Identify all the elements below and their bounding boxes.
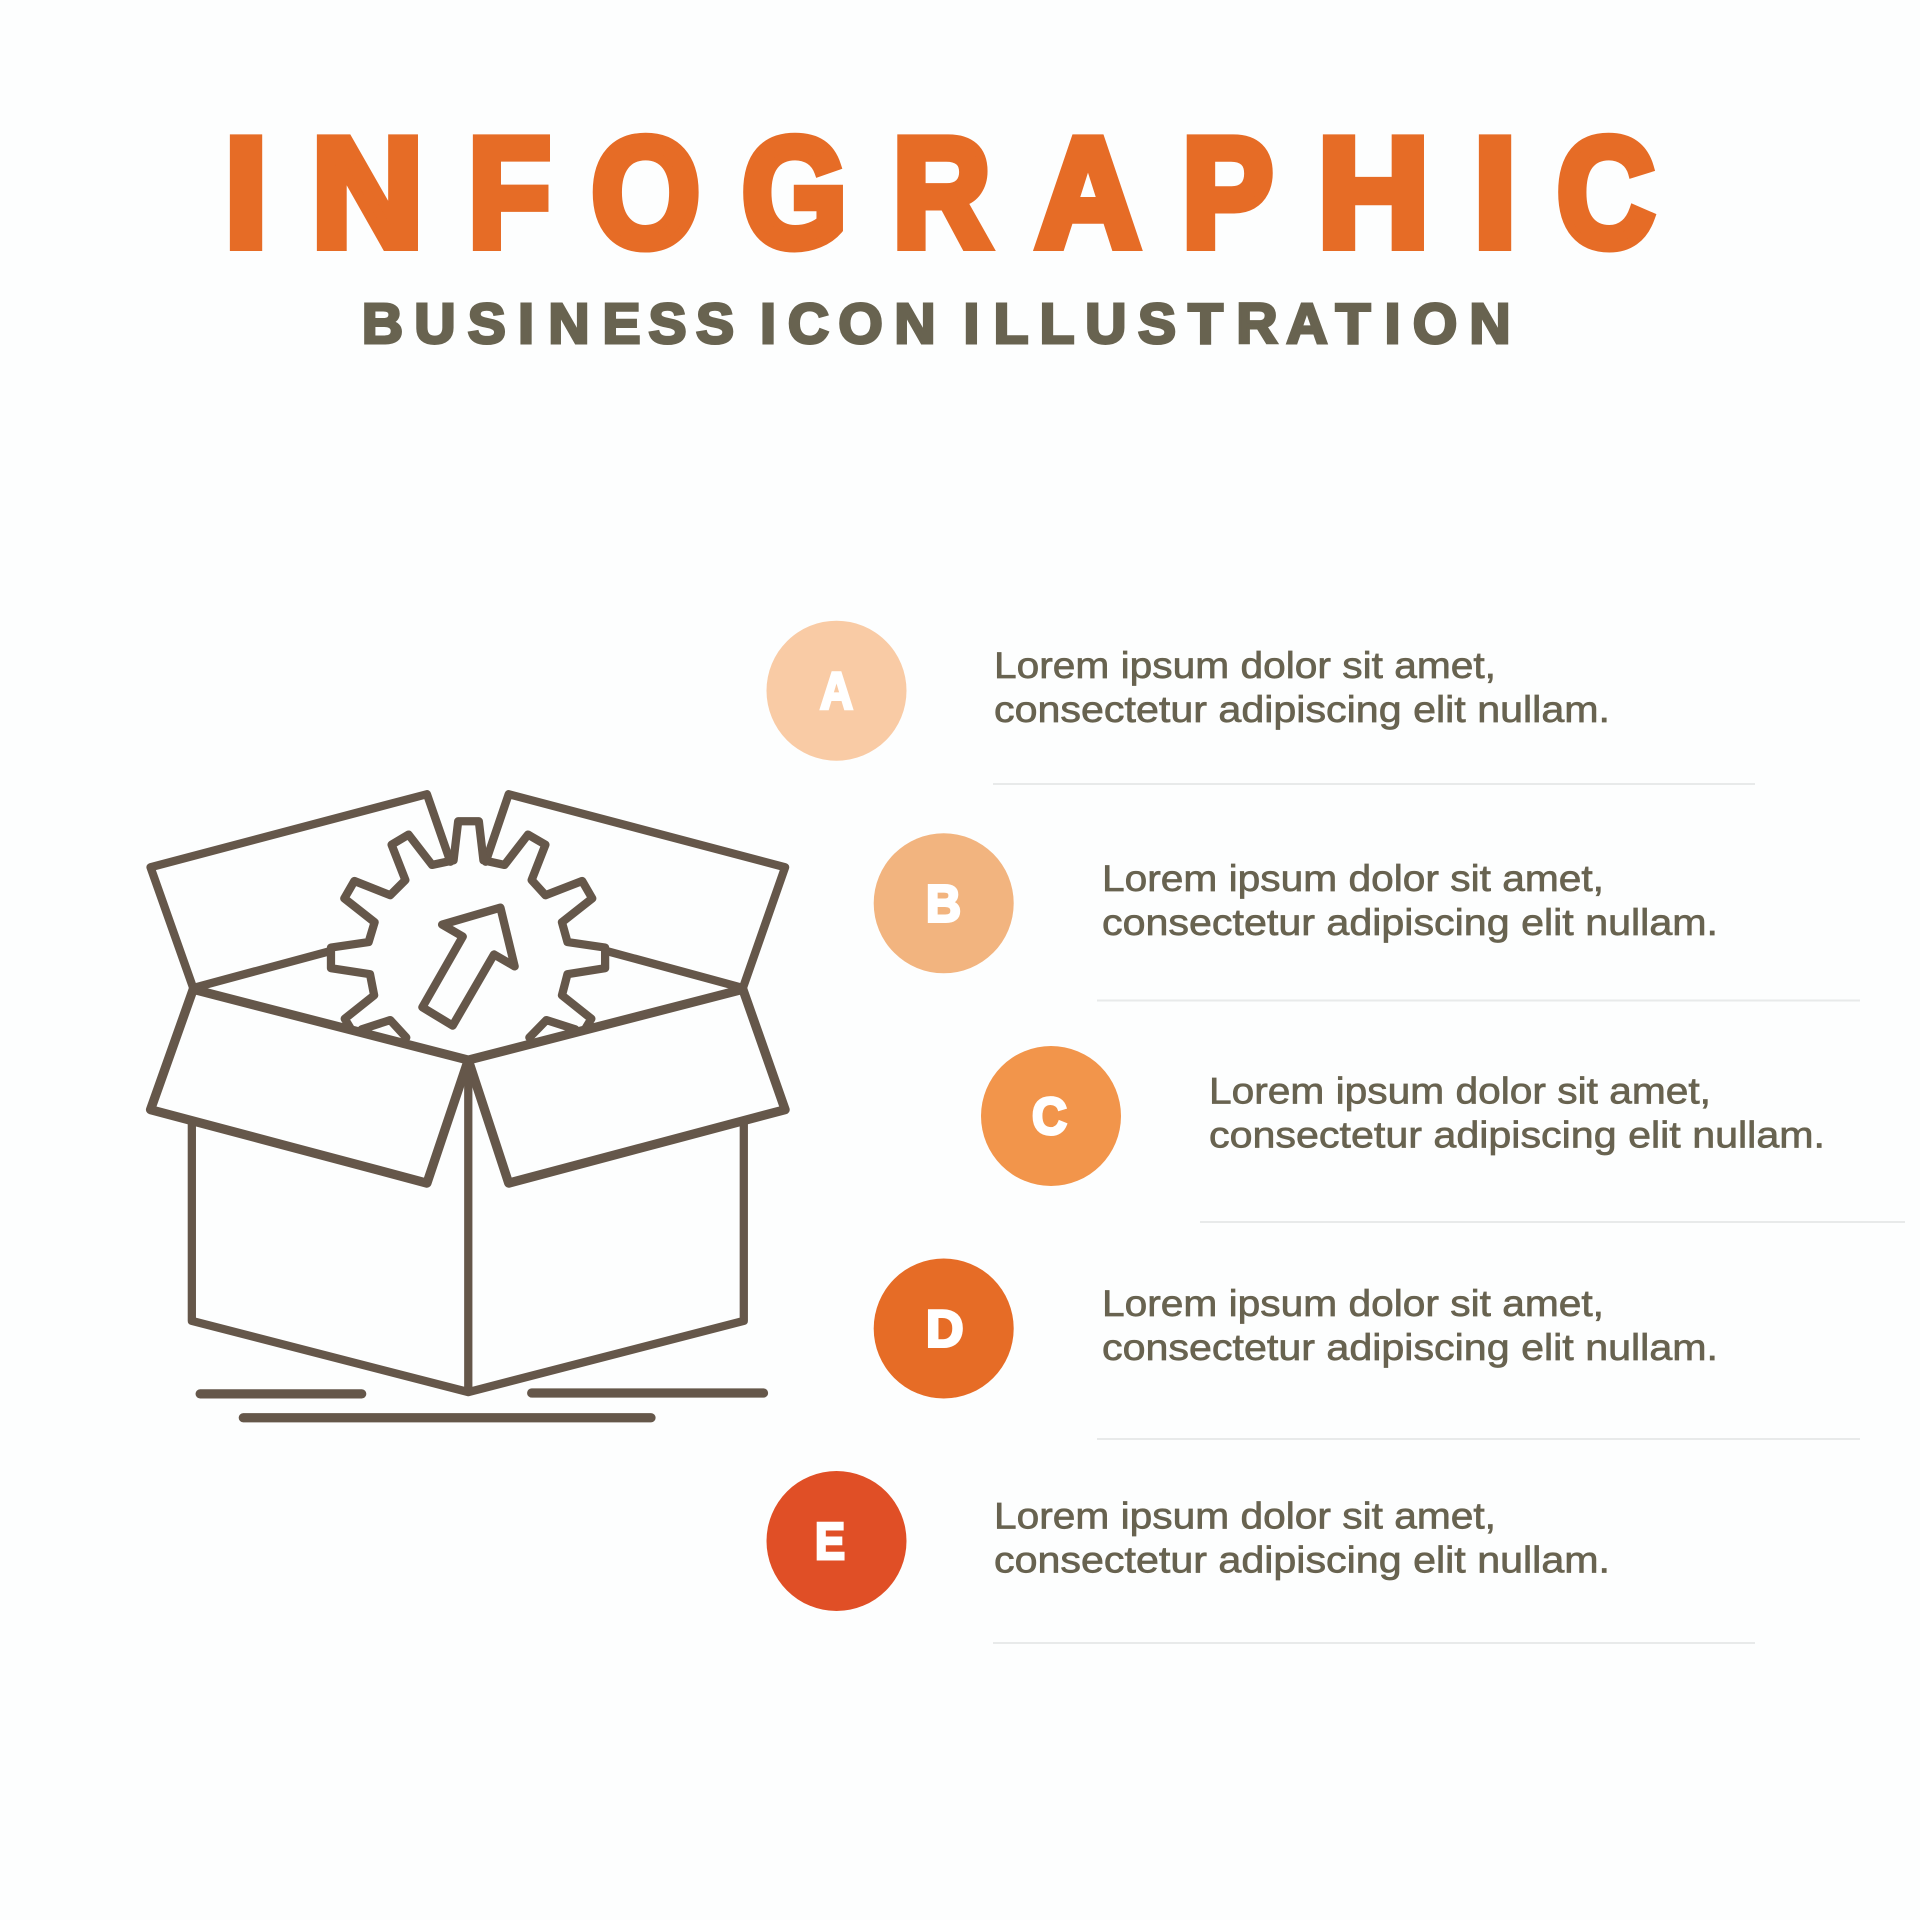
item B xyxy=(874,833,1860,1000)
item C xyxy=(981,1046,1905,1222)
title: O xyxy=(592,106,700,279)
text B: Lorem ipsum dolor sit amet, xyxy=(1102,858,1604,899)
text E: consectetur adipiscing elit nullam. xyxy=(994,1540,1610,1580)
badge D xyxy=(874,1258,1014,1398)
title: F xyxy=(468,106,551,279)
badge E xyxy=(766,1471,906,1611)
text E: Lorem ipsum dolor sit amet, xyxy=(994,1496,1496,1536)
text A: consectetur adipiscing elit nullam. xyxy=(994,689,1610,730)
text D: Lorem ipsum dolor sit amet, xyxy=(1102,1283,1604,1324)
item E xyxy=(766,1471,1755,1643)
title: G xyxy=(742,106,847,279)
title: H xyxy=(1318,106,1429,279)
text A: Lorem ipsum dolor sit amet, xyxy=(994,645,1496,686)
text C: consectetur adipiscing elit nullam. xyxy=(1209,1114,1825,1156)
title: P xyxy=(1182,106,1273,279)
title: C xyxy=(1557,106,1654,279)
title: R xyxy=(893,106,991,279)
badge C: C xyxy=(1032,1088,1067,1146)
badge D: D xyxy=(926,1300,964,1358)
ground lines xyxy=(200,1393,764,1418)
text D: consectetur adipiscing elit nullam. xyxy=(1102,1327,1718,1368)
gear xyxy=(331,821,605,1038)
arrow xyxy=(422,908,515,1026)
text C: Lorem ipsum dolor sit amet, xyxy=(1209,1070,1711,1112)
title: I xyxy=(1474,106,1517,279)
box body xyxy=(192,1060,744,1392)
text B: consectetur adipiscing elit nullam. xyxy=(1102,902,1718,943)
subtitle: BUSINESS ICON ILLUSTRATION xyxy=(362,292,1511,356)
badge A xyxy=(766,621,906,761)
icon: open box with gear and arrow xyxy=(151,794,785,1418)
title: N xyxy=(312,106,423,279)
box back flaps xyxy=(151,794,785,988)
badge E: E xyxy=(815,1513,845,1571)
item A xyxy=(766,621,1755,784)
title: I xyxy=(224,106,268,279)
badge C xyxy=(981,1046,1121,1186)
item D xyxy=(874,1258,1860,1439)
box front flaps and rim xyxy=(151,989,785,1183)
badge A: A xyxy=(820,662,853,720)
badge B: B xyxy=(926,876,961,934)
title: A xyxy=(1036,106,1140,279)
badge B xyxy=(874,833,1014,973)
